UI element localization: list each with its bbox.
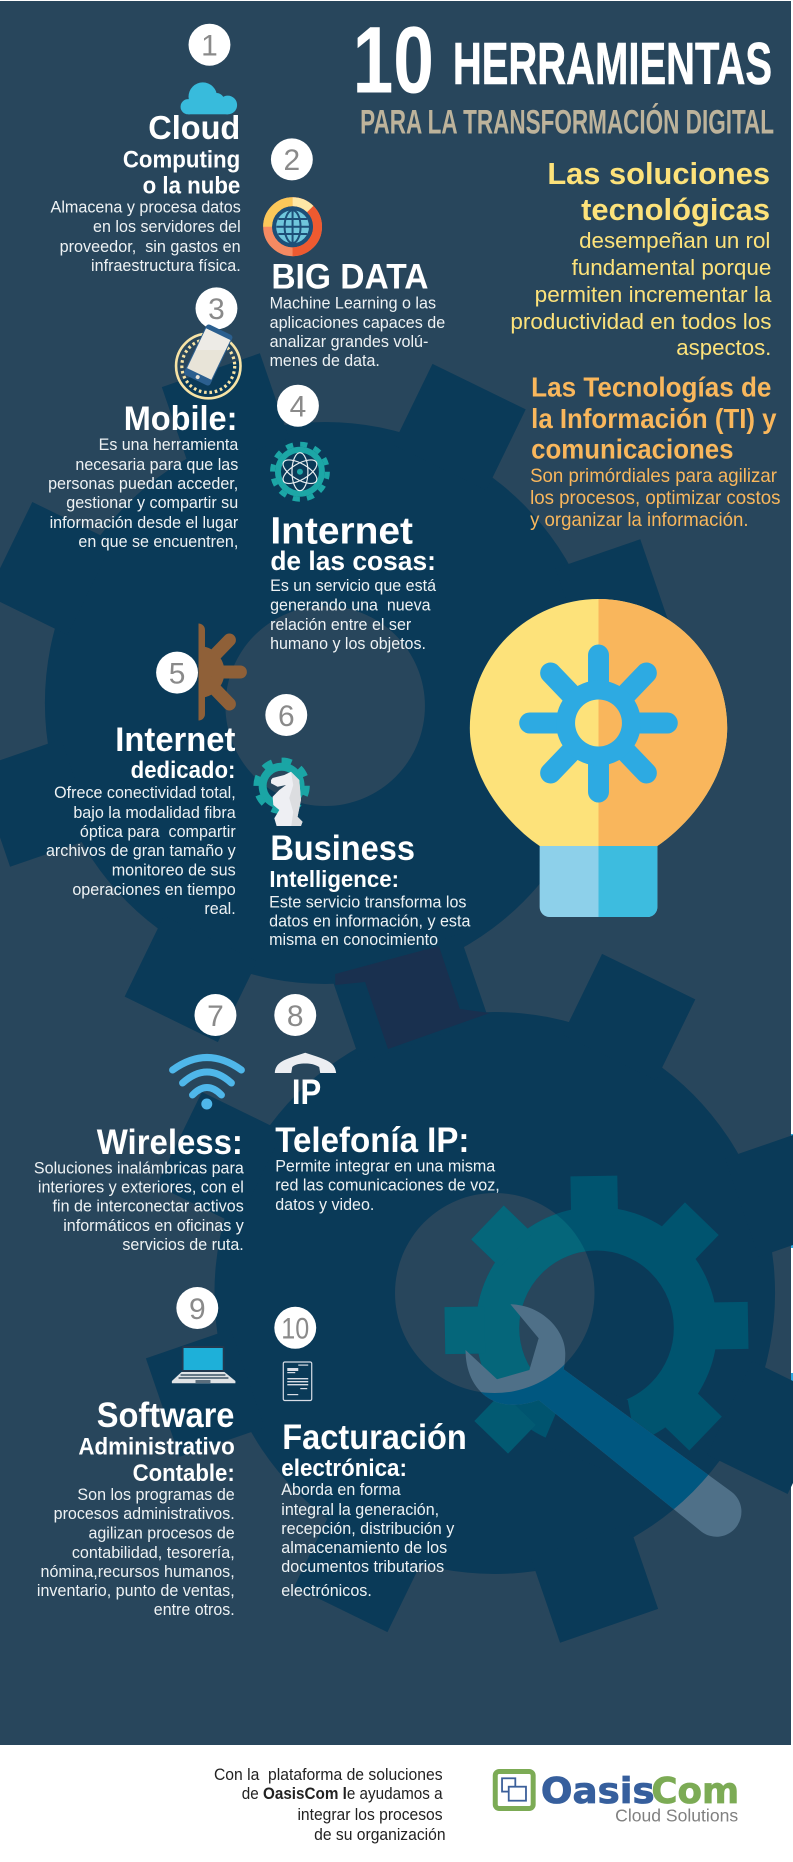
item 8: telefonía IP: Permite integrar en una misma (275, 1158, 496, 1176)
item 4: internet de las cosas: Internet (270, 511, 413, 553)
intro: tecnologías de la información (530, 372, 780, 531)
intro: tecnologías de la información: y organizar la información. (530, 510, 749, 531)
item 3: mobile: necesaria para que las (75, 456, 238, 474)
logo: OasisCom (495, 1771, 739, 1826)
item 8: telefonía IP: Telefonía IP: (275, 1121, 469, 1160)
item 8: telefonía IP: datos y video. (275, 1196, 374, 1214)
item 9: software administrativo: contabilidad, tesorería, (72, 1544, 235, 1562)
footer text (214, 1765, 446, 1844)
intro: soluciones tecnológicas: tecnológicas (581, 192, 770, 227)
title: 10 (353, 7, 434, 114)
intro: soluciones tecnológicas: productividad en todos los (510, 309, 771, 334)
item 5: internet dedicado: Ofrece conectividad total, (54, 784, 236, 802)
number 4 (277, 385, 319, 427)
item 10: facturación electrónica (274, 1307, 467, 1600)
item 1: cloud computing (51, 24, 241, 275)
item 2: big data (268, 138, 445, 370)
item 9: software administrativo: Contable: (133, 1460, 235, 1487)
icon: handset (275, 1053, 336, 1073)
background gears (0, 353, 793, 1643)
item 10: facturación electrónica: integral la generación, (281, 1501, 439, 1519)
item 8: telefonía IP: IP (292, 1073, 321, 1112)
item 1: cloud computing: Cloud (148, 110, 240, 147)
icon: cloud (181, 82, 237, 114)
number 3 (196, 287, 237, 329)
logo: OasisCom: Com (651, 1771, 739, 1812)
intro: soluciones tecnológicas: desempeñan un rol (579, 228, 770, 253)
item 3: mobile (48, 287, 240, 551)
right edge strip (791, 1134, 793, 1483)
item 9: software administrativo: entre otros. (154, 1601, 235, 1619)
wrench (466, 1304, 741, 1537)
item 5: internet dedicado: óptica para compartir (80, 823, 236, 841)
item 5: internet dedicado: Internet (115, 721, 235, 759)
intro: soluciones tecnológicas: aspectos. (676, 335, 771, 360)
item 7: wireless: servicios de ruta. (122, 1236, 244, 1254)
item 5: internet dedicado: dedicado: (131, 757, 235, 784)
number 7: 7 (207, 1000, 224, 1033)
item 1: cloud computing: Almacena y procesa datos (51, 199, 241, 217)
number 6: 6 (278, 700, 295, 733)
item 6: business intelligence: Este servicio transforma los (269, 893, 466, 912)
item 2: big data: aplicaciones capaces de (270, 314, 445, 332)
intro: soluciones tecnológicas: permiten incrementar la (535, 282, 772, 307)
number 3: 3 (208, 293, 225, 326)
item 5: internet dedicado: bajo la modalidad fibra (73, 804, 237, 822)
item 7: wireless: Wireless: (97, 1123, 243, 1162)
intro: soluciones tecnológicas: fundamental porque (572, 255, 771, 280)
item 4: internet de las cosas: Es un servicio que está (270, 577, 437, 595)
item 7: wireless (34, 994, 245, 1254)
item 2: big data: menes de data. (270, 352, 380, 370)
number 2: 2 (284, 144, 300, 177)
item 5: internet dedicado: operaciones en tiempo (72, 881, 236, 899)
number 5: 5 (169, 657, 185, 690)
item 2: big data: BIG DATA (271, 258, 428, 297)
item 1: cloud computing: infraestructura física. (91, 257, 241, 275)
item 9: software administrativo: Son los programas de (77, 1486, 235, 1504)
icon: phone (176, 323, 240, 398)
footer text: de OasisCom le ayudamos a (242, 1784, 443, 1803)
number 2 (271, 138, 313, 180)
item 1: cloud computing: proveedor, sin gastos en (60, 238, 241, 256)
item 7: wireless: interiores y exteriores, con el (38, 1179, 244, 1197)
icon: document (283, 1362, 312, 1400)
intro: tecnologías de la información: comunicaciones (531, 434, 733, 465)
item 1: cloud computing: o la nube (143, 173, 240, 200)
item 5: internet dedicado: archivos de gran tamaño y (46, 842, 236, 860)
intro: tecnologías de la información: la Información (TI) y (531, 403, 777, 434)
item 9: software administrativo: nómina,recursos humanos, (40, 1563, 235, 1581)
item 3: mobile: información desde el lugar (50, 514, 239, 532)
item 3: mobile: en que se encuentren, (78, 533, 238, 551)
item 5: internet dedicado: monitoreo de sus (112, 861, 236, 880)
item 3: mobile: personas puedan acceder, (48, 475, 238, 493)
item 8: telefonía IP: red las comunicaciones de voz, (275, 1177, 500, 1195)
item 7: wireless: Soluciones inalámbricas para (34, 1160, 245, 1178)
logo: OasisCom: Cloud Solutions (615, 1806, 738, 1826)
item 5: internet dedicado: real. (204, 900, 236, 918)
item 4: internet de las cosas: generando una nueva (270, 596, 431, 615)
icon: globe (268, 202, 318, 252)
item 9: software administrativo: agilizan procesos de (88, 1524, 235, 1543)
icon: laptop (172, 1346, 235, 1383)
item 8: telefonía IP (274, 994, 500, 1214)
item 7: wireless: informáticos en oficinas y (63, 1217, 245, 1235)
number 9 (176, 1287, 218, 1329)
number 10 (274, 1307, 316, 1349)
title (353, 7, 774, 142)
item 4: internet de las cosas (270, 385, 437, 653)
item 6: business intelligence: datos en información, y esta (269, 912, 471, 931)
item 9: software administrativo: procesos administrativos. (54, 1505, 235, 1523)
intro: tecnologías de la información: Las Tecnologías de (531, 372, 771, 403)
item 10: facturación electrónica: electrónicos. (281, 1582, 372, 1600)
item 1: cloud computing: en los servidores del (93, 218, 241, 236)
item 6: business intelligence: Business (270, 829, 415, 868)
item 2: big data: Machine Learning o las (270, 294, 436, 312)
item 3: mobile: Mobile: (124, 400, 237, 438)
footer text: Con la plataforma de soluciones (214, 1765, 443, 1784)
number 8: 8 (287, 1000, 304, 1033)
item 6: business intelligence: misma en conocimiento (269, 931, 438, 949)
number 1: 1 (201, 29, 218, 63)
icon: knight gear (257, 761, 307, 826)
item 10: facturación electrónica: Facturación (282, 1418, 467, 1457)
item 4: internet de las cosas: relación entre el ser (270, 616, 412, 634)
number 8 (274, 994, 316, 1036)
teal gear (444, 1176, 749, 1470)
intro: soluciones tecnológicas: Las soluciones (547, 156, 770, 191)
number 1 (189, 24, 230, 66)
item 2: big data: analizar grandes volú- (270, 333, 428, 351)
number 7 (195, 994, 236, 1036)
light bulb illustration (470, 599, 727, 917)
number 4: 4 (290, 390, 306, 424)
number 10: 10 (281, 1313, 309, 1346)
item 10: facturación electrónica: recepción, distribución y (281, 1520, 455, 1538)
icon: half gear (179, 630, 240, 714)
item 7: wireless: fin de interconectar activos (53, 1197, 244, 1216)
icon: atom gear (273, 444, 327, 499)
footer text: integrar los procesos (297, 1805, 443, 1824)
intro: tecnologías de la información: Son primórdiales para agilizar (530, 466, 777, 487)
item 10: facturación electrónica: Aborda en forma (281, 1481, 402, 1499)
item 3: mobile: gestionar y compartir su (66, 494, 238, 512)
icon: wifi (173, 1058, 241, 1110)
item 9: software administrativo: inventario, punto de ventas, (37, 1582, 235, 1600)
item 10: facturación electrónica: documentos tributarios (281, 1558, 444, 1576)
number 6 (265, 694, 307, 736)
number 5 (156, 652, 198, 694)
item 6: business intelligence: Intelligence: (269, 866, 399, 892)
item 9: software administrativo: Administrativo (78, 1434, 235, 1461)
item 4: internet de las cosas: de las cosas: (270, 546, 436, 576)
item 1: cloud computing: Computing (123, 147, 240, 174)
item 5: internet dedicado (46, 630, 240, 918)
item 6: business intelligence (257, 694, 471, 949)
item 10: facturación electrónica: electrónica: (281, 1455, 407, 1482)
intro: soluciones tecnológicas (510, 156, 772, 360)
logo: OasisCom: Oasis (541, 1771, 655, 1812)
item 9: software administrativo (37, 1287, 235, 1619)
item 4: internet de las cosas: humano y los objetos. (270, 635, 426, 653)
intro: tecnologías de la información: los procesos, optimizar costos (530, 488, 780, 509)
item 10: facturación electrónica: almacenamiento de los (281, 1539, 447, 1557)
footer text: de su organización (314, 1825, 446, 1844)
number 9: 9 (189, 1293, 206, 1326)
item 9: software administrativo: Software (97, 1396, 234, 1435)
item 3: mobile: Es una herramienta (99, 436, 239, 454)
